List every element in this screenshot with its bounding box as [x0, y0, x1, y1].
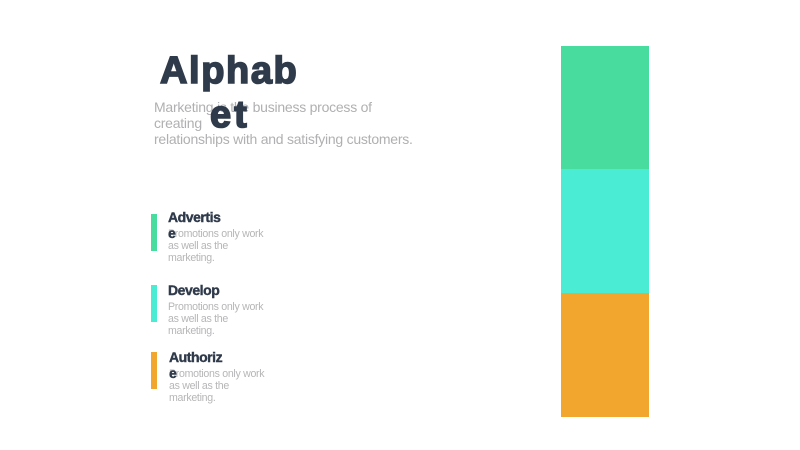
- description: Promotions only work: [169, 368, 264, 380]
- segment teal: [561, 169, 649, 293]
- heading: e: [168, 225, 175, 241]
- description: [168, 301, 264, 337]
- body paragraph: [154, 99, 413, 147]
- body paragraph: Marketing is the business process of: [154, 99, 372, 115]
- body paragraph: relationships with and satisfying customers.: [154, 131, 413, 147]
- segment orange: [561, 293, 649, 417]
- stacked colour column: [561, 46, 649, 417]
- heading: Develop: [168, 282, 219, 298]
- description: [169, 368, 264, 404]
- heading: Authoriz: [169, 349, 222, 365]
- description: as well as the: [168, 313, 228, 325]
- heading: [168, 209, 220, 241]
- accent bar orange: [151, 352, 157, 389]
- heading: [169, 349, 222, 381]
- item 3: authorize: [151, 349, 264, 404]
- description: marketing.: [168, 325, 214, 337]
- description: as well as the: [169, 380, 229, 392]
- accent bar teal: [151, 285, 157, 322]
- heading: e: [169, 365, 176, 381]
- description: Promotions only work: [168, 301, 263, 313]
- title: [160, 50, 298, 136]
- accent bar green: [151, 214, 157, 251]
- description: as well as the: [168, 240, 228, 252]
- segment green: [561, 46, 649, 169]
- heading: Advertis: [168, 209, 220, 225]
- description: Promotions only work: [168, 228, 263, 240]
- description: marketing.: [169, 392, 215, 404]
- title: Alphab: [160, 50, 298, 92]
- description: marketing.: [168, 252, 214, 264]
- title: et: [210, 94, 250, 136]
- item 2: develop: [151, 282, 264, 337]
- item 1: advertise: [151, 209, 264, 264]
- description: [168, 228, 264, 264]
- body paragraph: creating: [154, 115, 202, 131]
